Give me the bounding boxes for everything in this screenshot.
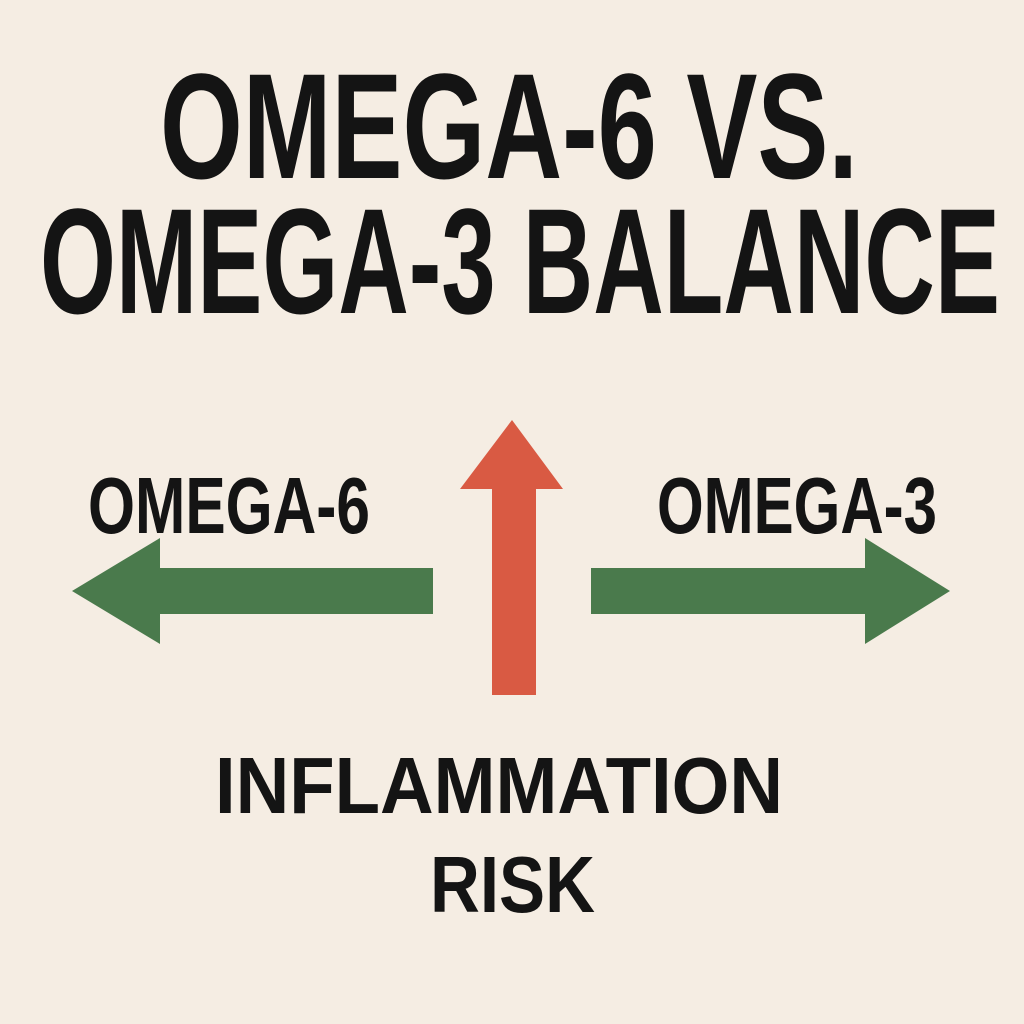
arrow: right green: [591, 538, 950, 644]
label: inflammation risk: INFLAMMATION: [215, 741, 783, 830]
arrow: red up: [460, 420, 563, 695]
title: [40, 42, 1000, 345]
label: inflammation risk: RISK: [430, 840, 595, 929]
arrow: left green: [72, 538, 433, 644]
label: omega-6: OMEGA-6: [88, 461, 370, 550]
label: inflammation risk: [215, 741, 783, 929]
label: omega-3: OMEGA-3: [657, 461, 937, 550]
